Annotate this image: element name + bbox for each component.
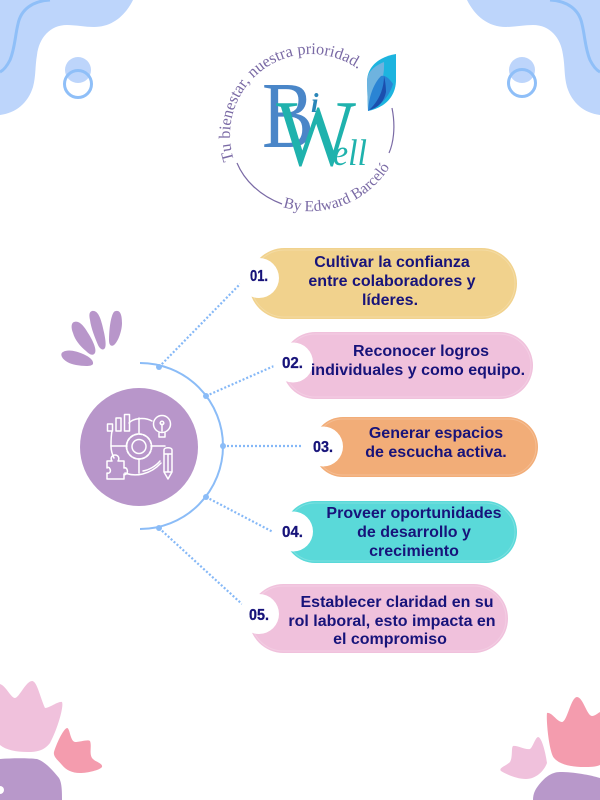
logo: letters ell: ell (333, 133, 367, 174)
number 01: 01. (250, 268, 268, 285)
text 05: rol laboral, esto impacta en (288, 613, 496, 630)
number 05: 05. (249, 607, 269, 624)
number 03: 03. (313, 439, 333, 456)
logo (218, 43, 396, 214)
decoration: bottom-left flowers (0, 681, 102, 800)
text 02: Reconocer logros (353, 343, 489, 360)
decorative petals (61, 311, 122, 366)
text 01: entre colaboradores y (308, 273, 476, 290)
text 05: Establecer claridad en su (301, 594, 493, 611)
pill 01 (239, 248, 517, 319)
text 03: Generar espacios (369, 425, 503, 442)
logo: letter B: B (262, 64, 314, 168)
pill 03 (303, 417, 538, 477)
text 01: Cultivar la confianza (314, 254, 470, 271)
logo: leaf (367, 54, 396, 111)
text 04: Proveer oportunidades (326, 505, 502, 522)
text 04: de desarrollo y (357, 524, 471, 541)
icon: strategy gear, bars, bulb, puzzle, pencil (107, 414, 172, 479)
logo: ring arcs (237, 108, 394, 204)
pill 05 (239, 584, 508, 653)
pill 04 (273, 501, 517, 563)
text 05: el compromiso (333, 631, 447, 648)
decoration: top-right blob (467, 0, 600, 115)
text 01: líderes. (362, 292, 418, 309)
central purple circle with strategy icon (80, 388, 198, 506)
connector arc with dots and dotted leaders (140, 281, 303, 605)
decoration: bottom-right flowers (500, 697, 600, 800)
text 03: de escucha activa. (365, 444, 507, 461)
logo: letter i: i (311, 88, 319, 118)
logo: letter W: W (276, 82, 356, 186)
logo: circular tagline: Tu bienestar, nuestra prioridad. (218, 43, 360, 163)
logo: byline: By Edward Barceló (283, 162, 388, 214)
number 04: 04. (282, 524, 303, 541)
decoration: top-left blob (0, 0, 133, 115)
pill 02 (273, 332, 533, 399)
number 02: 02. (282, 355, 303, 372)
text 04: crecimiento (369, 543, 459, 560)
text 02: individuales y como equipo. (311, 362, 525, 379)
